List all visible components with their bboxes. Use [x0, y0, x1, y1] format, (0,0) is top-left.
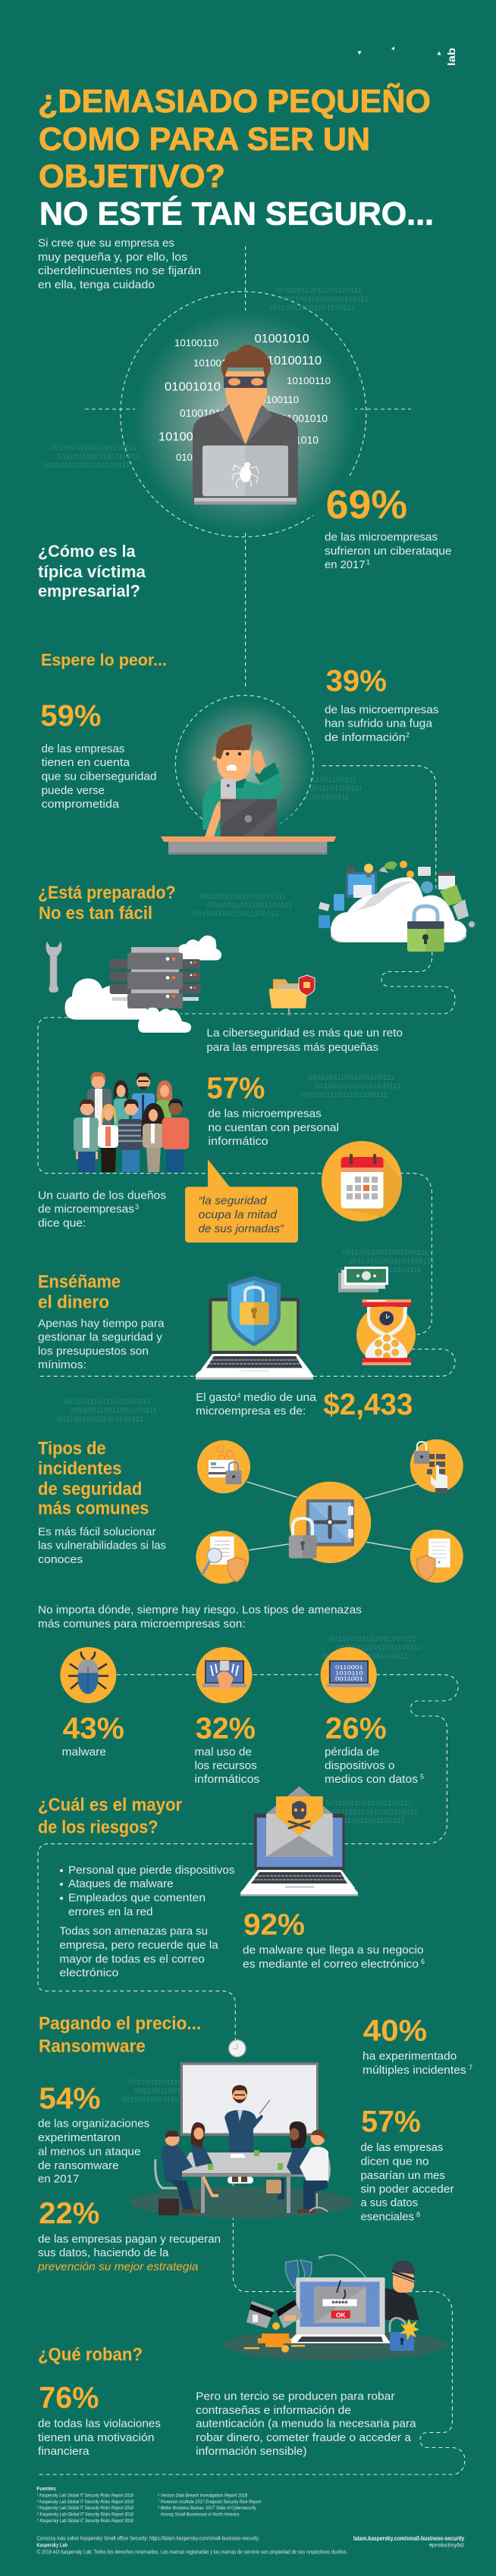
stat: 32%: 32% [196, 1712, 256, 1746]
stat: average spend: $2,433 [323, 1388, 413, 1421]
icon: envelope with skull [266, 1787, 333, 1857]
binary pattern: 001100110011001100111 [282, 295, 369, 303]
risk list: Empleados que comenten [68, 1892, 206, 1905]
heading: biggest risk: de los riesgos? [38, 1818, 158, 1838]
stat: 54%: experimentaron [38, 2131, 121, 2144]
stat: 32%: mal uso de [194, 1746, 252, 1758]
stat: 57% data access [361, 2105, 454, 2223]
binary pattern: 001100110011001100111 [129, 2078, 215, 2086]
table [179, 2150, 313, 2213]
text: email threat: electrónico [59, 1967, 118, 1980]
heading: ransomware: Pagando el precio... [39, 2014, 201, 2034]
callout [185, 1159, 298, 1243]
sources: ⁷ Ponemon Institute 2017 Endpoint Security Risk Report [158, 2499, 262, 2505]
worried man at desk [161, 724, 336, 855]
stat: 76%: financiera [38, 2445, 89, 2458]
stat: 40%: 7 [469, 2064, 472, 2071]
heading: are you prepared: ¿Está preparado? [38, 883, 176, 903]
binary code around hacker: 10100110 [174, 337, 218, 349]
hacker with laptop [193, 345, 298, 505]
laptop with shield [196, 1276, 313, 1380]
stat: 92%: de malware que llega a su negocio [243, 1944, 423, 1957]
sources: Among Small Businesses in North America [160, 2512, 240, 2517]
icon: app icons [319, 861, 475, 928]
intro text: en ella, tenga cuidado [38, 279, 155, 291]
right attendees [266, 2121, 329, 2213]
binary pattern: 001100110011001100111 [349, 1258, 435, 1265]
stat: average spend [196, 1388, 413, 1421]
stat: 59% [40, 699, 157, 811]
back row [87, 1072, 172, 1130]
binary code around hacker: 10100110 [159, 430, 213, 444]
stat: 32% [194, 1712, 259, 1786]
stat: 59%: comprometida [42, 798, 120, 811]
icon: phishing laptop: ***** [331, 2299, 348, 2309]
stat: 57% no IT staff: de las microempresas [208, 1107, 322, 1120]
sources [36, 2487, 262, 2524]
text: vulnerabilities: las vulnerabilidades si las [38, 1540, 166, 1552]
text: budgets: gestionar la seguridad y [38, 1330, 163, 1343]
callout: de sus jornadas” [199, 1222, 284, 1235]
cloud: left [65, 978, 152, 1020]
stat: 59%: 59% [40, 699, 101, 733]
heading: incident types: incidentes [38, 1458, 122, 1479]
icon: phishing laptop [287, 2255, 391, 2343]
binary pattern: 001100110011001100111 [322, 1652, 409, 1660]
stat: 54%: de las organizaciones [38, 2118, 149, 2131]
binary pattern: 001100110011001100111 [206, 902, 293, 909]
heading: teach me the money: Enséñame [38, 1272, 121, 1293]
binary code around hacker: 10100110 [255, 394, 299, 405]
binary code around hacker: 10100110 [287, 375, 331, 386]
binary pattern: 001100110011001100111 [336, 1644, 422, 1652]
stat: 76%: de todas las violaciones [38, 2418, 161, 2431]
binary pattern: 001100110011001100111 [309, 1074, 395, 1081]
text: quarter of owners: de microempresas [38, 1203, 134, 1216]
stat: average spend: medio de una [243, 1391, 317, 1404]
intro text: muy pequeña y, por ello, los [38, 251, 187, 264]
meeting scene [130, 2040, 353, 2218]
title [38, 83, 434, 232]
logo: lab [445, 48, 457, 66]
front row [74, 1099, 189, 1172]
heading: incident types: más comunes [38, 1499, 149, 1519]
stat: 92%: es mediante el correo electrónico [243, 1958, 419, 1971]
whiteboard [181, 2062, 319, 2136]
heading: are you prepared: No es tan fácil [39, 903, 152, 924]
text: vulnerabilities: conoces [38, 1553, 83, 1566]
text: email threat: mayor de todas es el correo [59, 1952, 205, 1965]
icon: laptop lost data: 0110001 [335, 1664, 363, 1671]
text: challenge: La ciberseguridad es más que un reto [206, 1027, 403, 1039]
heading: typical victim [38, 542, 146, 600]
stat: 69%: 69% [326, 483, 407, 527]
hacker in beanie [385, 2261, 419, 2320]
text: challenge [206, 1027, 403, 1054]
heading: ransomware [39, 2014, 201, 2057]
sources: ¹ Kaspersky Lab Global IT Security Risks Report 2018 [37, 2493, 133, 2498]
risk list [60, 1864, 235, 1918]
text: credentials: contraseñas e información de [196, 2404, 351, 2417]
stat: 22%: sus datos, haciendo de la [38, 2246, 169, 2259]
title: NO ESTÉ TAN SEGURO... [39, 195, 434, 232]
stat: 57% data access: a sus datos [361, 2196, 418, 2209]
left attendees [155, 2122, 218, 2215]
binary code around hacker: 01001010 [272, 434, 319, 446]
text: budgets [38, 1317, 165, 1371]
credit cards [246, 2299, 303, 2328]
stat: 76% [38, 2381, 161, 2458]
binary pattern: 001100110011001100111 [58, 453, 143, 461]
binary code around hacker: 01001010 [255, 333, 309, 345]
stat: average spend: 4 [237, 1392, 241, 1399]
stat: 43%: malware [62, 1746, 106, 1758]
footer: Kaspersky Lab [36, 2543, 67, 2549]
stat: 54% [38, 2082, 149, 2186]
stat: 26% [325, 1712, 424, 1786]
stat: 39%: 2 [406, 731, 410, 739]
footer [36, 2535, 465, 2556]
stat: 39%: de información [325, 731, 406, 744]
binary pattern: 001100110011001100111 [71, 1406, 157, 1414]
text: budgets: Apenas hay tiempo para [38, 1317, 165, 1330]
heading: biggest risk [38, 1795, 182, 1838]
binary code around hacker: 01001010 [165, 381, 221, 394]
binary code around hacker: 10100110 [267, 355, 322, 367]
stat: 32%: los recursos [194, 1759, 257, 1772]
stat: 57% data access: 57% [361, 2105, 421, 2138]
binary pattern: 001100110011001100111 [319, 1817, 405, 1824]
heading: incident types [38, 1438, 149, 1519]
icon: bug on laptop [232, 462, 259, 488]
text: vulnerabilities: Es más fácil solucionar [38, 1525, 156, 1538]
stat: 22%: 22% [39, 2197, 99, 2231]
cloud server stack [65, 936, 221, 1033]
stat: 39% [325, 664, 438, 744]
binary pattern: 001100110011001100111 [276, 286, 363, 294]
stat: 92%: 6 [421, 1958, 425, 1965]
text: credentials: información sensible) [196, 2445, 307, 2458]
stat: 57% data access: dicen que no [361, 2155, 429, 2168]
risk list: Ataques de malware [68, 1877, 174, 1890]
text: quarter of owners [38, 1190, 166, 1230]
icon: wall clock [229, 2040, 246, 2057]
icon: laptop lost data: 1010110 [335, 1670, 363, 1676]
binary pattern: 001100110011001100111 [302, 1091, 388, 1099]
text: credentials [196, 2390, 416, 2458]
text: budgets: mínimos: [38, 1358, 86, 1371]
stat: 40%: múltiples incidentes [363, 2064, 466, 2077]
heading: what do they steal: ¿Qué roban? [38, 2345, 143, 2365]
binary pattern: 001100110011001100111 [335, 1266, 422, 1274]
dashed connector route [37, 246, 465, 2474]
stat: 57% data access: pasarían un mes [361, 2169, 445, 2182]
heading: ransomware: Ransomware [39, 2037, 146, 2057]
binary pattern: 001100110011001100111 [193, 910, 279, 918]
stat: 76%: tienen una motivación [38, 2431, 155, 2444]
heading: typical victim: típica víctima [38, 562, 146, 581]
icon: document and magnifier [196, 1530, 249, 1583]
stat: 57% no IT staff [206, 1071, 339, 1148]
intro text: Si cree que su empresa es [38, 237, 174, 250]
stat: 40%: ha experimentado [363, 2050, 457, 2063]
icon: server units [110, 947, 201, 1008]
stat: 59%: de las empresas [42, 742, 124, 755]
sources: ⁴ Kaspersky Lab Global IT Security Risks Report 2018 [37, 2512, 133, 2517]
footer: © 2018 AO Kaspersky Lab. Todos los derechos reservados. Las marcas registradas y las marcas de servicio son propiedad de sus respectivos dueños. [36, 2549, 347, 2556]
binary pattern: 001100110011001100111 [329, 1635, 416, 1643]
binary pattern: 001100110011001100111 [44, 461, 130, 469]
stat: 26%: 5 [420, 1773, 424, 1780]
stat: 59%: puede verse [42, 784, 105, 797]
binary pattern: 001100110011001100111 [270, 776, 356, 783]
text: common threats intro: más comunes para microempresas son: [38, 1618, 246, 1630]
text: credentials: autenticación (a menudo la necesaria para [196, 2418, 416, 2431]
broken padlock [390, 2318, 419, 2351]
text: quarter of owners: 3 [135, 1203, 139, 1211]
stat: 54%: al menos un ataque [38, 2145, 141, 2158]
binary pattern: 001100110011001100111 [343, 1249, 429, 1256]
stat: 54%: en 2017 [38, 2173, 79, 2186]
icon: money stack [338, 1267, 388, 1293]
wrench [46, 942, 61, 993]
laptop with malicious email [240, 1787, 358, 1896]
sources: Fuentes [36, 2487, 56, 2492]
binary pattern: 001100110011001100111 [277, 785, 363, 792]
stat: 57% no IT staff: no cuentan con personal [208, 1121, 339, 1134]
stat: 32%: informáticos [194, 1773, 259, 1786]
stat: 92%: 92% [243, 1909, 305, 1942]
icon: card and lock [197, 1440, 250, 1493]
coins pile [244, 2322, 305, 2352]
footer: latam.kaspersky.com/small-business-security [353, 2535, 465, 2542]
title: OBJETIVO? [39, 158, 225, 195]
risk list: Personal que pierde dispositivos [68, 1864, 235, 1877]
heading: teach me the money [38, 1272, 121, 1312]
group of people [74, 1072, 189, 1172]
stat: average spend: microempresa es de: [196, 1405, 306, 1418]
stat: 26%: medios con datos [325, 1773, 418, 1786]
binary code around hacker: 10100110 [193, 358, 237, 368]
stat: 59%: tienen en cuenta [42, 756, 130, 769]
callout: ocupa la mitad [199, 1208, 278, 1221]
binary pattern: 001100110011001100111 [121, 2096, 208, 2103]
icon: shield with lock [228, 1276, 281, 1346]
title: COMO PARA SER UN [39, 121, 370, 158]
stat: 92% [243, 1909, 425, 1971]
stat: 22% [37, 2197, 221, 2273]
icon: hourglass with coins [356, 1299, 416, 1365]
stat: 39%: 39% [326, 664, 387, 698]
stat: 57% no IT staff: 57% [206, 1071, 265, 1105]
cloud with lock and app icons [319, 861, 475, 952]
text: common threats intro: No importa dónde, siempre hay riesgo. Los tipos de amenazas [38, 1603, 362, 1616]
stat: 69%: en 2017 [325, 558, 366, 571]
text: email threat: empresa, pero recuerde que la [59, 1939, 218, 1952]
text: common threats intro [38, 1603, 362, 1630]
binary code around hacker: 01001010 [180, 407, 227, 419]
binary code around hacker [159, 333, 331, 463]
floor [224, 2330, 447, 2360]
binary pattern: 001100110011001100111 [200, 893, 287, 900]
stat: 57% data access: sin poder acceder [361, 2183, 454, 2196]
icon: central safe [289, 1482, 371, 1563]
stat: average spend: El gasto [196, 1391, 237, 1404]
binary pattern [44, 286, 435, 2103]
text: quarter of owners: dice que: [38, 1217, 86, 1230]
cloud: right [177, 936, 221, 961]
binary pattern: 001100110011001100111 [135, 2087, 221, 2094]
sources: ⁸ Better Business Bureau: 2017 State of Cybersecurity [158, 2506, 256, 2511]
stat: 43%: 43% [63, 1712, 124, 1746]
stat: 57% data access: 8 [416, 2211, 420, 2218]
glow behind hacker [134, 311, 356, 532]
text: email threat: Todas son amenazas para su [59, 1925, 208, 1938]
binary pattern: 001100110011001100111 [51, 444, 137, 452]
stat: 26%: 26% [325, 1712, 387, 1746]
binary code around hacker: 01001010 [281, 412, 328, 424]
binary pattern: 001100110011001100111 [263, 793, 350, 801]
cloud: bottom [138, 1008, 191, 1033]
sources: ⁵ Kaspersky Lab Global IT Security Risks Report 2018 [37, 2518, 133, 2524]
heading: incident types: de seguridad [38, 1479, 142, 1499]
binary pattern: 001100110011001100111 [64, 1398, 151, 1405]
callout: “la seguridad [199, 1195, 267, 1208]
text: budgets: los presupuestos son [38, 1345, 149, 1358]
icon: keypad and lock [410, 1440, 463, 1493]
icon: malware bug [60, 1647, 116, 1703]
stat: 26%: pérdida de [325, 1746, 379, 1758]
stat: 69%: de las microempresas [325, 531, 438, 544]
stat: 69%: sufrieron un ciberataque [325, 545, 452, 558]
footer: Conozca más sobre Kaspersky Small office Security: https://latam.kaspersky.com/small-business-security [36, 2537, 259, 2542]
sources: ⁶ Verizon Data Breach Investigation Report 2018 [158, 2493, 247, 2498]
stat: 22%: de las empresas pagan y recuperan [38, 2233, 221, 2246]
text: vulnerabilities [38, 1525, 166, 1566]
stat: 54%: 54% [39, 2082, 101, 2115]
stat: 69% [325, 483, 452, 571]
binary pattern: 001100110011001100111 [58, 1415, 143, 1423]
text: email threat [59, 1925, 218, 1980]
stat: 54%: de ransomware [38, 2159, 119, 2172]
heading: biggest risk: ¿Cuál es el mayor [38, 1795, 182, 1815]
binary pattern: 001100110011001100111 [332, 1808, 419, 1815]
heading: are you prepared [38, 883, 176, 924]
stat: 26%: dispositivos o [325, 1759, 394, 1772]
binary pattern: 001100110011001100111 [268, 304, 355, 311]
binary code around hacker: 01001010 [176, 452, 220, 463]
heading: teach me the money: el dinero [38, 1292, 109, 1312]
icon: laptop lost data: 0011001 [335, 1675, 363, 1682]
icon: padlock [407, 906, 444, 952]
intro text [38, 237, 201, 291]
stat: 59%: que su ciberseguridad [42, 770, 156, 783]
folder with shield [269, 975, 315, 1015]
intro text: ciberdelincuentes no se fijarán [38, 264, 201, 277]
presenter [224, 2085, 270, 2171]
stat: 57% data access: de las empresas [361, 2141, 443, 2154]
stat: 40%: 40% [363, 2015, 427, 2048]
icon: document and shield [410, 1530, 463, 1583]
stat: 39%: de las microempresas [325, 703, 438, 716]
heading: typical victim: ¿Cómo es la [38, 542, 136, 561]
stat: 76%: 76% [39, 2381, 99, 2415]
icon: calendar [322, 1141, 402, 1221]
text: credentials: Pero un tercio se producen para robar [196, 2390, 395, 2402]
floor [130, 2187, 353, 2218]
text: challenge: para las empresas más pequeñas [206, 1041, 378, 1054]
sources: ³ Kaspersky Lab Global IT Security Risks Report 2018 [37, 2506, 133, 2511]
logo [358, 47, 457, 66]
stat: 22%: prevención su mejor estrategia [37, 2260, 199, 2273]
heading: incident types: Tipos de [38, 1438, 106, 1458]
stat: 39%: han sufrido una fuga [325, 717, 433, 730]
risk list: errores en la red [68, 1905, 153, 1918]
icon: laptop lost data [321, 1647, 377, 1703]
stat: 57% data access: esenciales [361, 2211, 414, 2223]
footer: #protectmybiz [429, 2541, 465, 2549]
binary pattern: 001100110011001100111 [326, 1799, 412, 1807]
phishing scene [224, 2255, 447, 2360]
heading: expect the worst: Espere lo peor... [41, 651, 167, 670]
glow behind worried man [178, 700, 312, 833]
text: quarter of owners: Un cuarto de los dueños [38, 1190, 166, 1202]
broken shield [286, 2260, 312, 2288]
binary pattern: 001100110011001100111 [315, 1082, 401, 1089]
stat: 57% no IT staff: informático [208, 1135, 268, 1148]
stat: 40% [363, 2015, 472, 2077]
heading: typical victim: empresarial? [38, 582, 140, 600]
icon: phishing laptop: OK [336, 2311, 346, 2318]
icon: laptop misuse [196, 1647, 252, 1703]
stat: 69%: 1 [366, 558, 370, 566]
text: credentials: robar dinero, cometer fraude o acceder a [196, 2431, 412, 2444]
incident network diagram [196, 1440, 463, 1583]
title: ¿DEMASIADO PEQUEÑO [38, 83, 431, 120]
sources: ² Kaspersky Lab Global IT Security Risks Report 2018 [37, 2499, 133, 2505]
